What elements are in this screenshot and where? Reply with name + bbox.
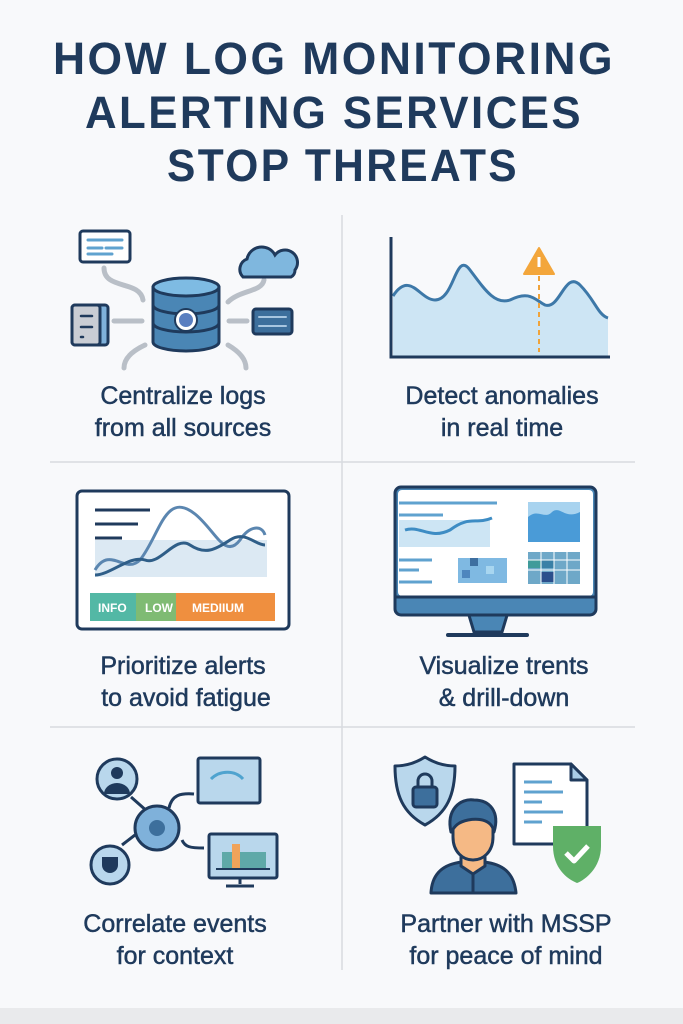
caption: detect: in real time — [441, 414, 563, 442]
caption: prioritize: to avoid fatigue — [101, 684, 271, 712]
panel: prioritize alerts — [77, 491, 289, 712]
icon: alert dashboard: MEDIIUM — [192, 601, 244, 615]
icon: alert dashboard — [77, 491, 289, 629]
caption: partner: for peace of mind — [409, 942, 603, 970]
caption: visualize: Visualize trents — [419, 652, 589, 680]
caption: prioritize: Prioritize alerts — [100, 652, 266, 680]
panel: centralize logs — [72, 231, 298, 442]
caption: partner: Partner with MSSP — [400, 910, 612, 938]
panel: correlate events — [83, 758, 277, 970]
title: ALERTING SERVICES — [85, 87, 583, 138]
caption: detect: Detect anomalies — [405, 382, 599, 410]
caption: visualize: & drill-down — [439, 684, 569, 712]
caption: correlate — [83, 910, 267, 970]
caption: visualize — [419, 652, 589, 712]
caption: correlate: Correlate events — [83, 910, 267, 938]
panel: partner with MSSP — [395, 757, 612, 970]
caption: partner — [400, 910, 612, 970]
caption: centralize: Centralize logs — [100, 382, 266, 410]
chart: anomaly line — [391, 237, 610, 357]
icon: alert dashboard: INFO — [98, 601, 127, 615]
caption: detect — [405, 382, 599, 442]
caption: centralize: from all sources — [95, 414, 271, 442]
panel: visualize trends — [395, 487, 596, 712]
icon: monitor dashboard — [395, 487, 596, 635]
caption: prioritize — [100, 652, 271, 712]
panel: detect anomalies — [391, 237, 610, 442]
title: STOP THREATS — [167, 140, 519, 191]
icon: analyst with shield and report — [395, 757, 601, 893]
icon: correlation network — [91, 758, 277, 886]
title — [53, 33, 615, 191]
icon: alert dashboard: LOW — [145, 601, 174, 615]
icon: database with sources — [72, 231, 298, 368]
title: HOW LOG MONITORING — [53, 33, 615, 84]
caption: correlate: for context — [117, 942, 233, 970]
caption: centralize — [95, 382, 271, 442]
